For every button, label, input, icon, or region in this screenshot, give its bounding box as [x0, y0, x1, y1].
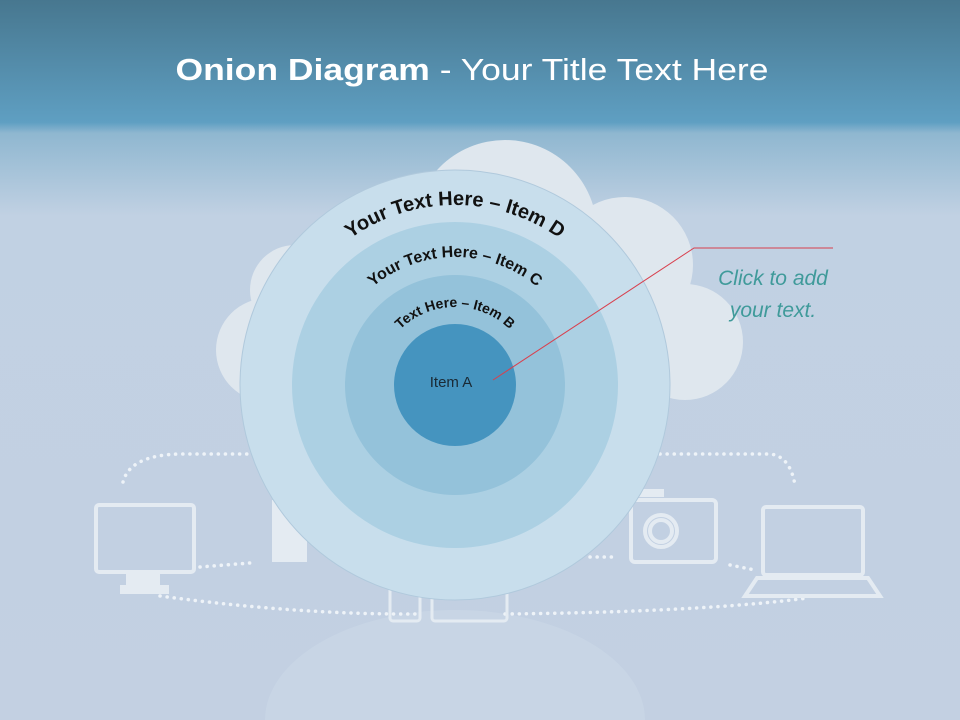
- label: item D: Your Text Here – Item D: [343, 191, 564, 236]
- icon: camera: [631, 491, 716, 562]
- core: item A: [394, 324, 516, 446]
- icon: laptop: [745, 507, 880, 596]
- label: item A: Item A: [430, 374, 472, 391]
- ring: item B: [345, 275, 565, 495]
- onion diagram: [240, 170, 670, 600]
- title: Onion Diagram - Your Title Text Here: [176, 52, 768, 87]
- label: item C: Your Text Here – Item C: [366, 246, 542, 285]
- callout text: your text.: [728, 299, 816, 322]
- ring: item C: [292, 222, 618, 548]
- decorative reflection: [265, 610, 645, 720]
- icon: tablets: [390, 585, 507, 621]
- callout text: [718, 267, 829, 322]
- callout line: [493, 248, 833, 380]
- ring: item D: [240, 170, 670, 600]
- cloud: [216, 140, 743, 402]
- icon: monitor: [96, 505, 194, 592]
- icon: tower: [272, 500, 307, 562]
- label: item B: Text Here – Item B: [394, 300, 514, 328]
- network dotted lines: [123, 454, 808, 614]
- callout text: Click to add: [718, 267, 829, 290]
